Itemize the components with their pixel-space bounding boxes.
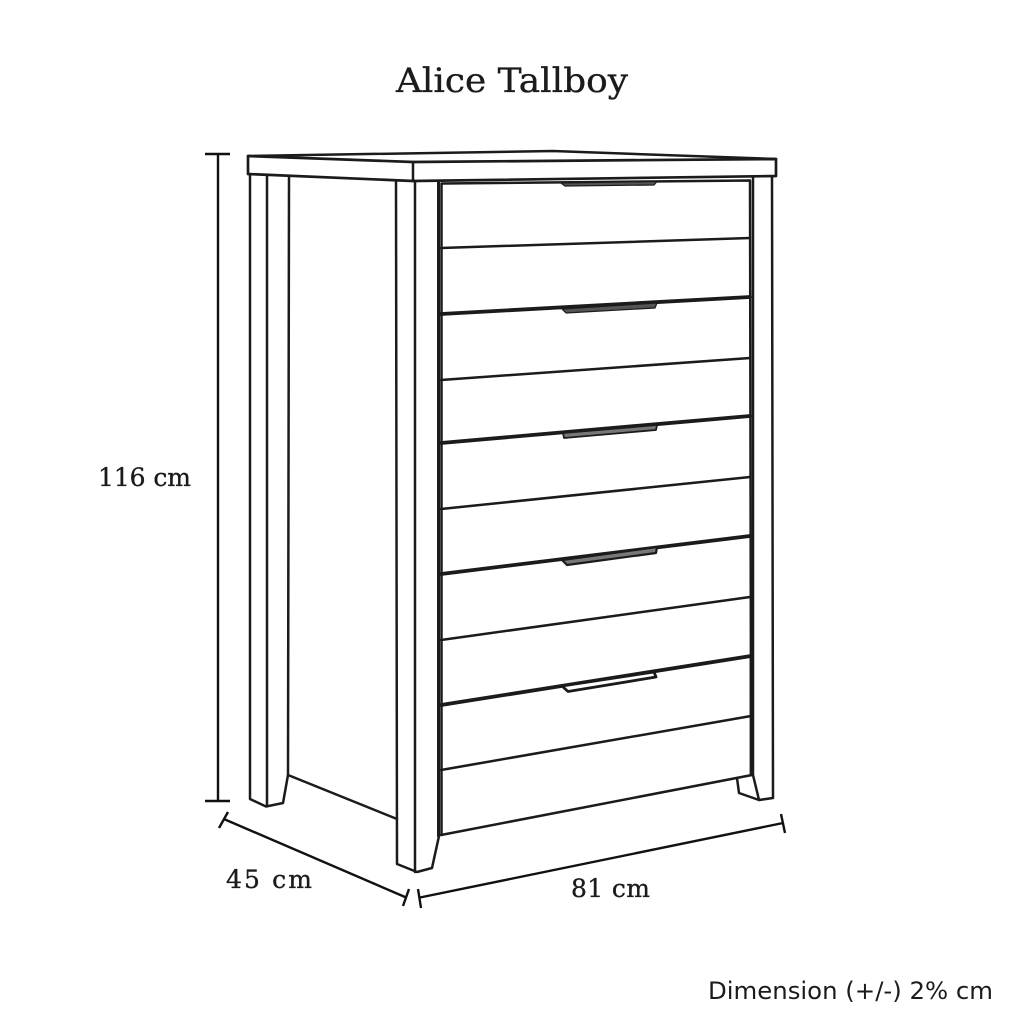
handle 2 <box>562 303 657 313</box>
handle 5 <box>562 672 656 692</box>
drawer 2 <box>441 297 750 380</box>
table top <box>248 151 776 181</box>
height label: 116 cm <box>98 463 191 492</box>
handle 3 <box>563 425 657 438</box>
drawer 4 <box>441 536 750 640</box>
depth label: 45 cm <box>226 865 312 894</box>
handle 4 <box>562 547 657 565</box>
drawer 3 <box>441 416 750 509</box>
drawer 5 <box>441 656 752 835</box>
side panel bottom edge <box>288 775 397 819</box>
left rear leg <box>250 175 289 806</box>
tolerance note: Dimension (+/-) 2% cm <box>708 977 993 1005</box>
width label: 81 cm <box>571 874 650 903</box>
right leg <box>737 177 773 800</box>
title: Alice Tallboy <box>395 61 629 101</box>
width dimension line <box>418 814 785 908</box>
drawer fronts outline <box>442 180 751 835</box>
tallboy line drawing <box>248 151 776 872</box>
depth dimension line <box>219 812 409 906</box>
handle 1 <box>561 182 657 186</box>
drawer 1 <box>441 182 750 248</box>
front left leg <box>396 181 439 872</box>
height dimension line <box>205 154 230 801</box>
